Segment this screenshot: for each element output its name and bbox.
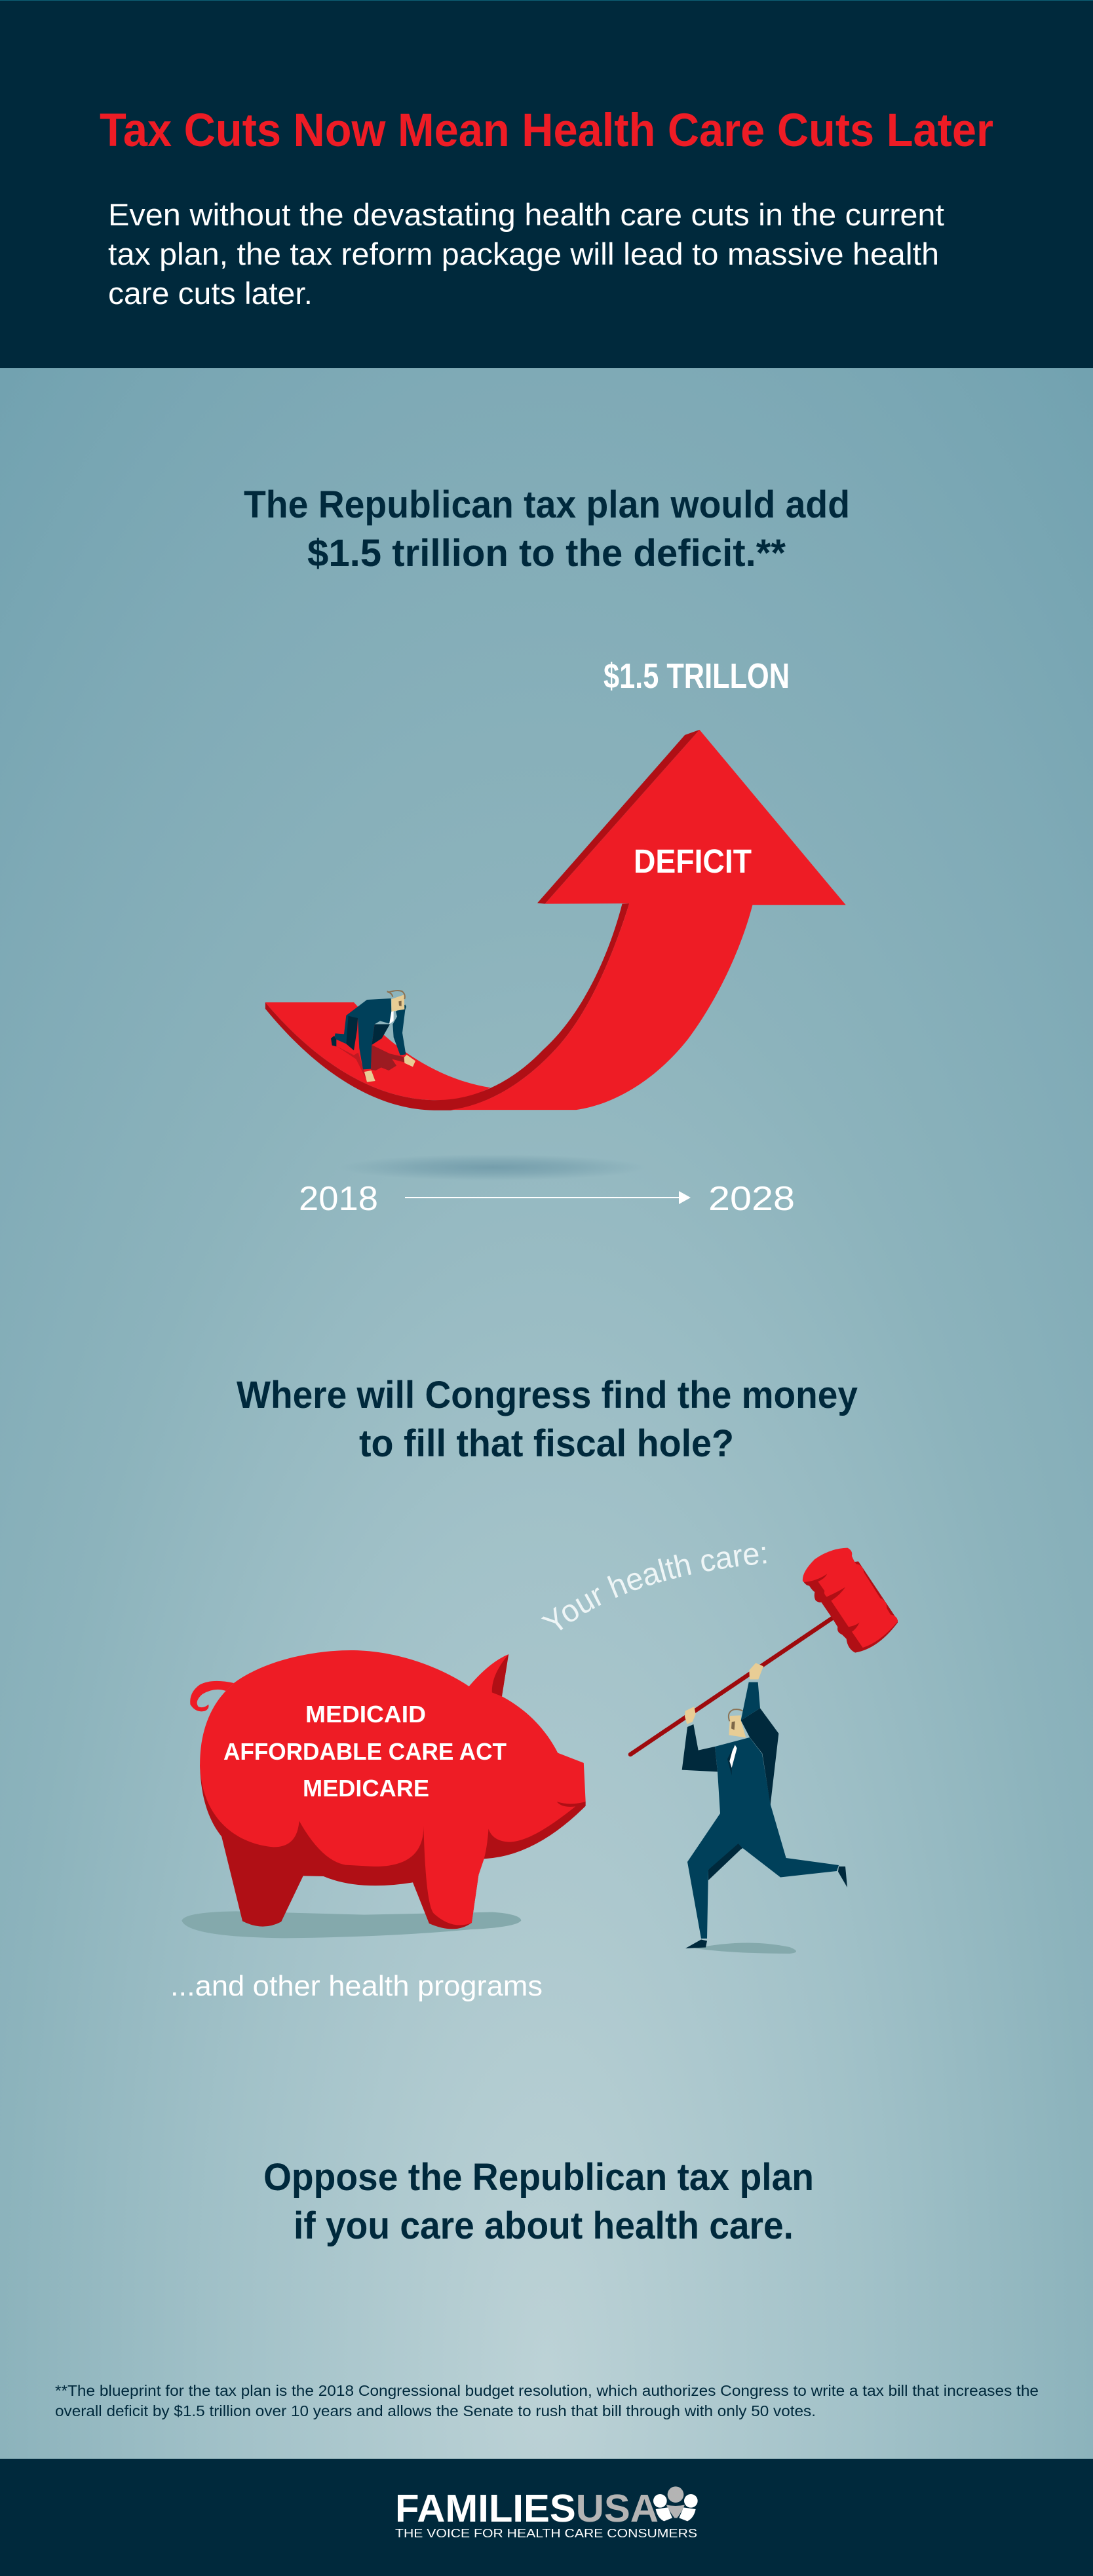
logo tagline: THE VOICE FOR HEALTH CARE CONSUMERS	[395, 2527, 697, 2540]
timeline 2018 to 2028: 2018	[299, 1180, 378, 1218]
man lower body	[687, 1737, 839, 1939]
pig labels: MEDICAID	[305, 1701, 426, 1728]
header panel	[0, 0, 1093, 368]
call to action: Oppose the Republican tax plan	[263, 2156, 814, 2199]
heading: fiscal hole: Where will Congress find the money	[237, 1374, 858, 1416]
pig labels: AFFORDABLE CARE ACT	[223, 1738, 507, 1765]
red deficit arrow	[265, 730, 846, 1110]
footnote: **The blueprint for the tax plan is the 2018 Congressional budget resolution, which authorizes Congress to write a tax bill that increases the	[55, 2382, 1039, 2399]
logo wordmark: FAMILIESUSA	[395, 2487, 659, 2530]
title: Tax Cuts Now Mean Health Care Cuts Later	[100, 105, 993, 157]
intro text: care cuts later.	[108, 276, 313, 311]
intro text: tax plan, the tax reform package will lead to massive health	[108, 237, 939, 271]
pig labels	[223, 1701, 507, 1802]
icon: crouching businessman	[331, 991, 415, 1082]
caption: other health programs: ...and other health programs	[170, 1970, 543, 2002]
intro text: Even without the devastating health care cuts in the current	[108, 197, 944, 232]
timeline 2018 to 2028: 2028	[708, 1180, 795, 1218]
intro text	[108, 197, 944, 311]
heading: fiscal hole: to fill that fiscal hole?	[359, 1422, 734, 1465]
timeline 2018 to 2028	[299, 1180, 795, 1218]
footer panel	[0, 2459, 1093, 2576]
illustration: man with gavel	[630, 1548, 898, 1954]
illustration: piggy bank	[182, 1650, 586, 1938]
heading: deficit: $1.5 trillion to the deficit.**	[307, 532, 786, 575]
footnote: overall deficit by $1.5 trillion over 10 years and allows the Senate to rush that bill through with only 50 votes.	[55, 2402, 816, 2419]
footnote	[55, 2382, 1039, 2419]
gavel handle	[630, 1618, 832, 1754]
curved caption: your health care: Your health care:	[541, 1546, 767, 1630]
heading: deficit: The Republican tax plan would add	[244, 483, 850, 526]
call to action: if you care about health care.	[294, 2205, 794, 2247]
call to action	[263, 2156, 814, 2247]
logo icon: three people	[653, 2486, 698, 2521]
man upper body	[682, 1663, 778, 1805]
heading: deficit	[244, 483, 850, 575]
heading: fiscal hole	[237, 1374, 858, 1465]
label: $1.5 trillon: $1.5 TRILLON	[604, 656, 790, 696]
pig labels: MEDICARE	[303, 1775, 429, 1802]
gavel head	[803, 1548, 898, 1653]
shadow under arrow	[339, 1154, 647, 1181]
arrow: timeline	[405, 1191, 691, 1204]
label: deficit: DEFICIT	[634, 843, 752, 880]
